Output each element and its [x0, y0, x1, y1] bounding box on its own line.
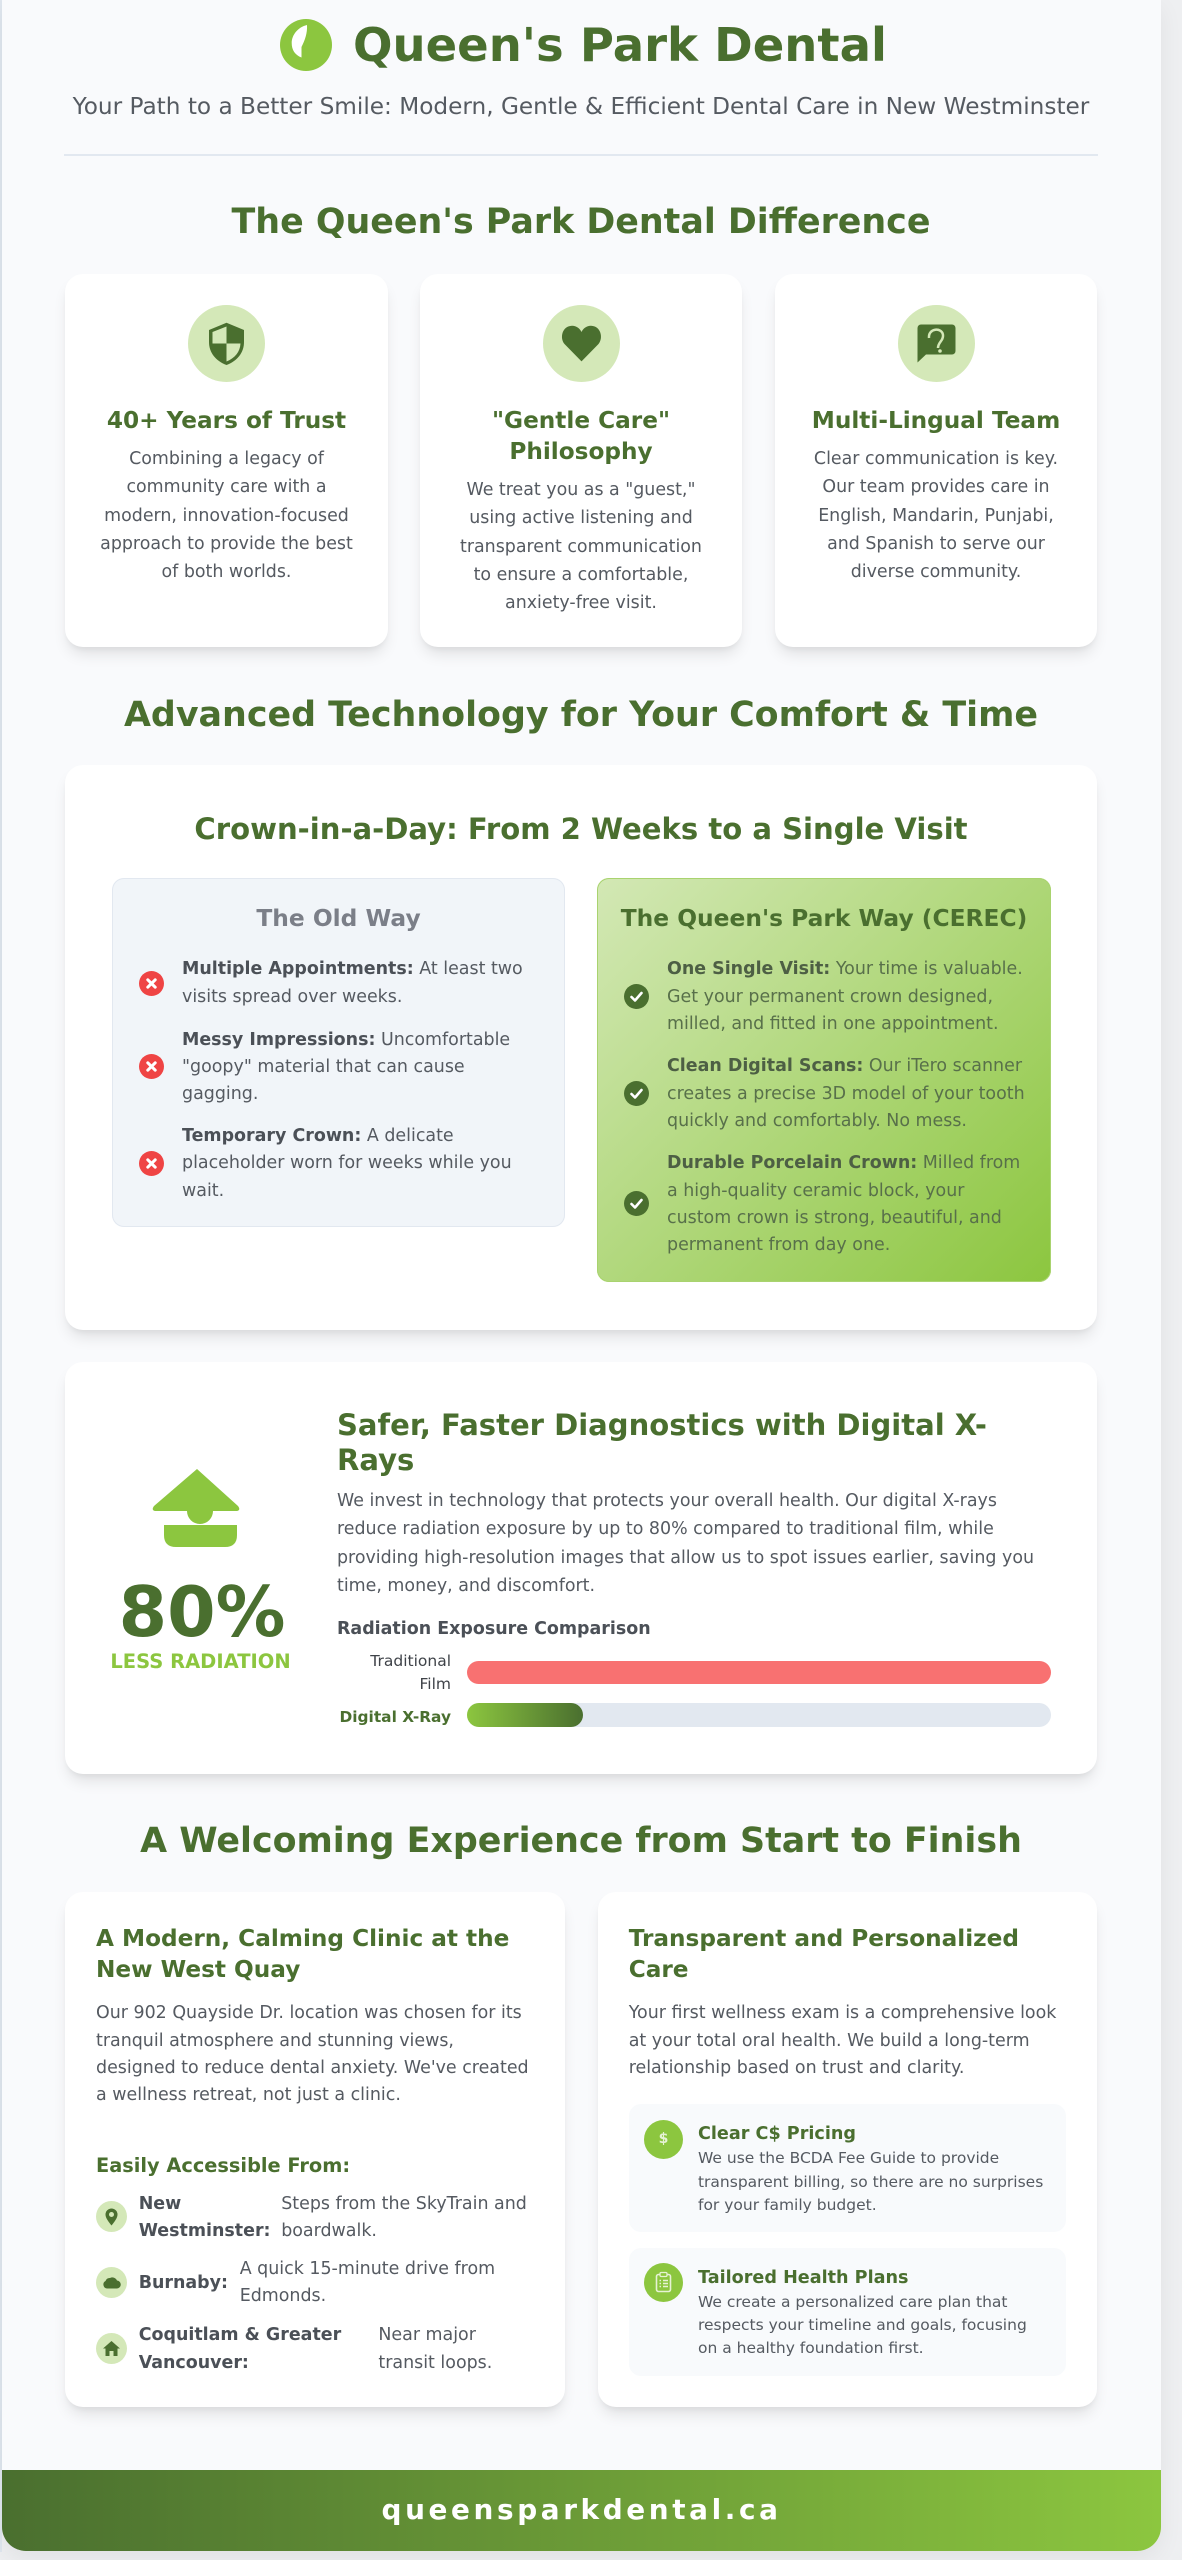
location detail: transit loops. — [378, 2353, 492, 2373]
feature text: We create a personalized care plan that — [698, 2293, 1008, 2311]
left page edge — [0, 0, 2, 2552]
icon: dollar — [644, 2120, 683, 2159]
heading: Safer, Faster Diagnostics with Digital X- — [337, 1408, 987, 1442]
location name — [139, 2194, 271, 2241]
panel heading — [96, 1925, 509, 1983]
panel heading: New West Quay — [96, 1956, 300, 1983]
stat: 80%: 80% — [119, 1572, 285, 1652]
location: coquitlam and greater vancouver — [138, 2325, 492, 2373]
icon: house — [96, 2333, 127, 2364]
card text: using active listening and — [469, 508, 693, 528]
paragraph: time, money, and discomfort. — [337, 1576, 595, 1596]
queen's park way title: The Queen's Park Way (CEREC) — [621, 904, 1027, 932]
paragraph: tranquil atmosphere and stunning views, — [96, 2031, 454, 2051]
bar: digital x-ray — [467, 1703, 1051, 1727]
card text: English, Mandarin, Punjabi, — [818, 506, 1054, 526]
website address: queensparkdental.ca — [382, 2493, 782, 2526]
item: durable porcelain crown: custom crown is strong, beautiful, and — [667, 1208, 1002, 1228]
card text: Clear communication is key. — [814, 449, 1058, 469]
icon: map pin — [96, 2201, 127, 2232]
panel: gentle care philosophy — [420, 274, 742, 647]
card text: We treat you as a "guest," — [466, 480, 695, 500]
panel: crown-in-a-day — [65, 765, 1097, 1330]
panel: transparent care — [598, 1892, 1097, 2407]
location name — [138, 2325, 342, 2373]
panel: multi-lingual team — [775, 274, 1097, 647]
card title: "Gentle Care" — [492, 407, 670, 434]
label: digital x-ray: Digital X-Ray — [339, 1708, 451, 1726]
paragraph: reduce radiation exposure by up to 80% compared to traditional film, while — [337, 1519, 994, 1539]
bar: traditional film — [467, 1661, 1051, 1684]
paragraph — [337, 1491, 1034, 1596]
icon: leaf logo — [280, 19, 332, 71]
icon: clipboard — [644, 2263, 683, 2302]
icon: red cross — [139, 971, 164, 996]
item: messy impressions: Messy Impressions: Uncomfortable — [182, 1030, 510, 1050]
label: traditional film: Traditional — [370, 1652, 451, 1670]
item: clean digital scans: creates a precise 3D model of your tooth — [667, 1084, 1025, 1104]
old way title: The Old Way — [256, 904, 421, 932]
panel: 40+ years of trust — [65, 274, 388, 647]
card title: 40+ Years of Trust — [107, 407, 346, 434]
paragraph: Our 902 Quayside Dr. location was chosen for its — [96, 2003, 522, 2023]
card text: transparent communication — [460, 537, 702, 557]
paragraph: relationship based on trust and clarity. — [629, 2058, 964, 2078]
heading: the difference: The Queen's Park Dental Difference — [232, 202, 930, 242]
card text — [814, 449, 1058, 582]
item: clean digital scans: quickly and comfortably. No mess. — [667, 1111, 967, 1131]
panel: digital x-rays — [65, 1362, 1097, 1774]
card text: and Spanish to serve our — [827, 534, 1045, 554]
panel heading — [628, 1925, 1019, 1983]
item: durable porcelain crown — [667, 1153, 1020, 1255]
feature text: on a healthy foundation first. — [698, 2339, 924, 2357]
feature title: Tailored Health Plans — [698, 2268, 908, 2288]
item: temporary crown — [182, 1126, 512, 1200]
location name: New — [139, 2194, 181, 2214]
card text: modern, innovation-focused — [104, 506, 349, 526]
location detail — [281, 2194, 527, 2241]
paragraph: We invest in technology that protects your overall health. Our digital X-rays — [337, 1491, 997, 1511]
location: new westminster — [139, 2194, 527, 2241]
heading: Rays — [337, 1443, 414, 1477]
location detail — [378, 2325, 492, 2373]
item: messy impressions: "goopy" material that can cause — [182, 1057, 465, 1077]
location name: Burnaby: — [139, 2273, 228, 2293]
paragraph: designed to reduce dental anxiety. We've created — [96, 2058, 529, 2078]
panel: calming clinic — [65, 1892, 565, 2407]
feature text: respects your timeline and goals, focusing — [698, 2316, 1027, 2334]
item: durable porcelain crown: permanent from day one. — [667, 1235, 890, 1255]
item: clean digital scans — [667, 1056, 1025, 1131]
location detail: Near major — [378, 2325, 476, 2345]
paragraph: at your total oral health. We build a long-term — [629, 2031, 1030, 2051]
location detail — [240, 2259, 495, 2306]
location detail: Steps from the SkyTrain and — [281, 2194, 527, 2214]
paragraph — [629, 2000, 1056, 2082]
item: messy impressions — [182, 1030, 510, 1104]
chart title: Radiation Exposure Comparison — [337, 1619, 651, 1639]
icon: radiation arrow — [152, 1469, 240, 1547]
panel: the queen's park way — [597, 878, 1051, 1282]
heading: advanced technology: Advanced Technology for Your Comfort & Time — [124, 694, 1038, 734]
feature: tailored plans — [629, 2248, 1066, 2376]
paragraph — [96, 2003, 529, 2105]
card text: anxiety-free visit. — [505, 593, 657, 613]
icon: shield — [188, 305, 265, 382]
icon: cloud — [96, 2267, 127, 2298]
card text: Our team provides care in — [822, 477, 1050, 497]
item: multiple appointments — [182, 959, 523, 1007]
icon: red cross — [139, 1054, 164, 1079]
label: traditional film: Film — [420, 1675, 451, 1693]
panel: the old way — [112, 878, 565, 1227]
icon: red cross — [139, 1151, 164, 1176]
card title: Philosophy — [509, 438, 653, 465]
item: one single visit — [667, 959, 1023, 1034]
feature text: transparent billing, so there are no surprises — [698, 2173, 1043, 2191]
paragraph: Your first wellness exam is a comprehensive look — [629, 2003, 1056, 2023]
paragraph: providing high-resolution images that allow us to spot issues earlier, saving you — [337, 1548, 1034, 1568]
location: burnaby — [139, 2259, 495, 2306]
item: clean digital scans: Clean Digital Scans: Our iTero scanner — [667, 1056, 1022, 1076]
card title: Multi-Lingual Team — [812, 407, 1060, 434]
icon: green check — [624, 1081, 649, 1106]
footer — [2, 2470, 1161, 2551]
bar fill: 20% — [467, 1703, 583, 1727]
card text — [460, 480, 702, 613]
item: one single visit: milled, and fitted in one appointment. — [667, 1014, 999, 1034]
feature text: We use the BCDA Fee Guide to provide — [698, 2149, 999, 2167]
icon: green check — [624, 1191, 649, 1216]
label: traditional film — [370, 1652, 451, 1693]
item: temporary crown: Temporary Crown: A delicate — [182, 1126, 454, 1146]
icon: question speech bubble — [898, 305, 975, 382]
item: temporary crown: wait. — [182, 1180, 224, 1200]
subtitle: Your Path to a Better Smile: Modern, Gentle & Efficient Dental Care in New Westminster — [73, 92, 1089, 120]
feature title: Clear C$ Pricing — [698, 2124, 856, 2144]
card text: diverse community. — [851, 562, 1021, 582]
heading — [337, 1408, 987, 1477]
item: multiple appointments: visits spread over weeks. — [182, 987, 402, 1007]
card text: approach to provide the best — [100, 534, 353, 554]
feature: clear pricing — [629, 2104, 1066, 2232]
location name: Vancouver: — [139, 2353, 249, 2373]
panel heading: A Modern, Calming Clinic at the — [96, 1925, 509, 1952]
item: multiple appointments: Multiple Appointments: At least two — [182, 959, 523, 979]
card text: Combining a legacy of — [129, 449, 324, 469]
subheading: accessible from: Easily Accessible From: — [96, 2154, 350, 2176]
panel heading: Transparent and Personalized — [629, 1925, 1019, 1952]
location name: Coquitlam & Greater — [139, 2325, 341, 2345]
panel heading: Care — [629, 1956, 689, 1983]
feature text — [698, 2291, 1027, 2361]
item: one single visit: Get your permanent crown designed, — [667, 987, 993, 1007]
title: Queen's Park Dental — [353, 18, 887, 72]
location detail: boardwalk. — [281, 2221, 377, 2241]
card title — [492, 407, 670, 465]
feature text — [698, 2147, 1043, 2217]
location name: Westminster: — [139, 2221, 271, 2241]
location detail: Edmonds. — [240, 2286, 326, 2306]
item: messy impressions: gagging. — [182, 1084, 258, 1104]
icon: dollar: $ — [659, 2131, 668, 2147]
card text: of both worlds. — [162, 562, 291, 582]
paragraph: a wellness retreat, not just a clinic. — [96, 2085, 401, 2105]
location detail: A quick 15-minute drive from — [240, 2259, 495, 2279]
item: durable porcelain crown: a high-quality ceramic block, your — [667, 1181, 964, 1201]
icon: green check — [624, 984, 649, 1009]
card text — [100, 449, 353, 582]
card text: to ensure a comfortable, — [474, 565, 688, 585]
item: one single visit: One Single Visit: Your time is valuable. — [667, 959, 1023, 979]
heading: welcoming experience: A Welcoming Experience from Start to Finish — [140, 1821, 1022, 1861]
header — [72, 18, 1090, 120]
item: durable porcelain crown: Durable Porcelain Crown: Milled from — [667, 1153, 1020, 1173]
chart: radiation exposure comparison — [337, 1619, 1051, 1727]
item: temporary crown: placeholder worn for weeks while you — [182, 1153, 512, 1173]
icon: heart — [543, 305, 620, 382]
stat label: LESS RADIATION — [110, 1650, 291, 1672]
feature text: for your family budget. — [698, 2196, 877, 2214]
panel heading: Crown-in-a-Day: From 2 Weeks to a Single Visit — [194, 812, 968, 846]
card text: community care with a — [126, 477, 327, 497]
